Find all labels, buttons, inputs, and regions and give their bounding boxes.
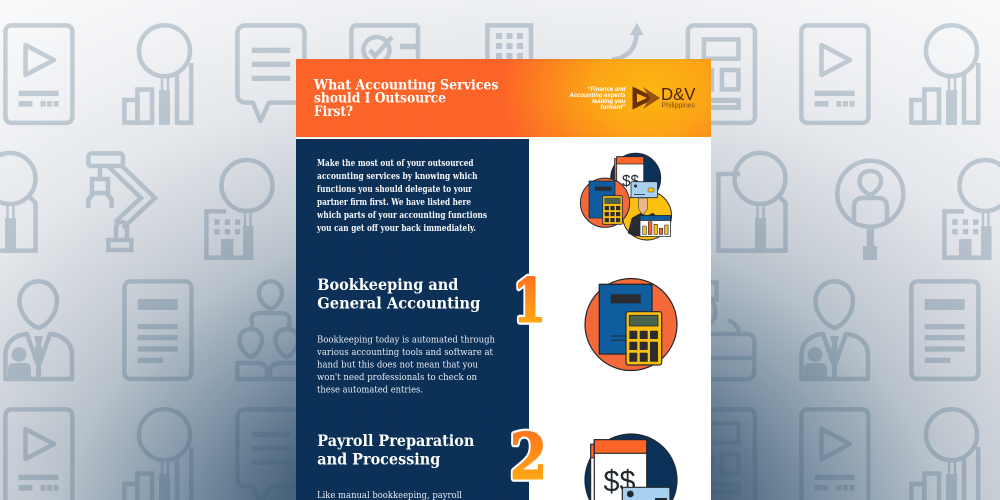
icon: book and calculator: [585, 278, 677, 370]
invoice sheet: $$: [604, 464, 636, 498]
credit card: [622, 487, 670, 500]
icon: magnifier with bar chart: [124, 25, 191, 125]
title: First?: [314, 104, 353, 120]
yellow circle with person and chart: [622, 191, 672, 240]
icon: office building: [487, 25, 531, 123]
logo tagline: [568, 87, 626, 111]
heading: section 1: [317, 275, 480, 312]
heading: section 1: Bookkeeping and: [317, 275, 458, 294]
heading: section 1: General Accounting: [317, 293, 480, 312]
logo tagline: leading you: [592, 99, 626, 105]
intro paragraph: accounting services by knowing which: [317, 171, 478, 182]
navy circle with bill and card: $$: [622, 173, 639, 190]
title: What Accounting Services: [313, 77, 499, 93]
icon: video document: [5, 409, 72, 500]
intro paragraph: Make the most out of your outsourced: [317, 158, 474, 169]
panel: orange header: [296, 59, 711, 137]
icon: manager with small person: [5, 281, 72, 381]
credit card: [631, 182, 658, 198]
icon: magnifier over person: [837, 161, 903, 260]
heading: section 2: and Processing: [317, 449, 440, 468]
logo subtitle: Philippines: [662, 100, 695, 110]
intro paragraph: you can get off your back immediately.: [316, 223, 476, 234]
logo wordmark: D&V: [661, 84, 696, 104]
icon: magnifier over document: [0, 153, 35, 253]
body text: section 1: Bookkeeping today is automated through: [317, 334, 495, 345]
title: should I Outsource: [314, 91, 446, 107]
icon: magnifier with bar chart: [124, 409, 191, 500]
intro paragraph: which parts of your accounting functions: [316, 210, 487, 221]
logo mark: [632, 86, 660, 110]
icon: video document: [801, 409, 868, 500]
panel: infographic page: [296, 59, 711, 500]
number 1: 1: [513, 266, 546, 336]
number 2: 2: [510, 420, 547, 494]
number 2: 2: [510, 420, 547, 494]
icon: speech bubble: [237, 409, 304, 500]
icon: group of people at desks: [237, 281, 299, 379]
icon: stacked books and cap: [680, 282, 754, 379]
body text: section 1: won't need professionals to check on: [317, 372, 477, 383]
body text: section 1: [316, 334, 495, 396]
intro paragraph: partner firm first. We have listed here: [317, 197, 471, 208]
icon: magnifier over building: [944, 160, 1000, 260]
icon: magnifier with bar chart: [911, 409, 978, 500]
icon: report document: [124, 281, 191, 379]
orange circle with book and calculator: [580, 178, 630, 227]
logo tagline: Accounting experts: [568, 93, 626, 99]
icon: checklist card: [351, 25, 418, 83]
back sheet: [591, 444, 596, 500]
yellow calculator: [626, 312, 662, 365]
title: [313, 77, 499, 120]
logo tagline: “Finance and: [587, 87, 626, 93]
icon: speech bubble: [237, 25, 304, 121]
logo tagline: forward”: [600, 105, 626, 111]
body text: section 1: these automated entries.: [317, 385, 423, 396]
icon: video document: [801, 25, 868, 123]
icon: robotic arm: [88, 153, 155, 250]
icon: newspaper layout: [688, 409, 755, 500]
icon: video document: [5, 25, 72, 123]
icon: report document: [911, 281, 978, 379]
icon: accounting services cluster: [580, 153, 672, 240]
icon: growth arrow: [612, 23, 644, 60]
intro paragraph: functions you should delegate to your: [317, 184, 472, 195]
logo: D&V Philippines: [632, 84, 696, 110]
icon: manager with small person: [801, 281, 868, 381]
icon: magnifier over building: [206, 160, 272, 260]
icon: invoice and credit card: [585, 434, 677, 500]
intro paragraph: [316, 158, 487, 234]
panel: navy text column: [296, 139, 529, 500]
blue ledger book: [599, 284, 652, 354]
icon: magnifier with bar chart: [911, 25, 978, 125]
number 1: 1: [513, 266, 546, 336]
body text: section 1: various accounting tools and software at: [316, 347, 493, 358]
body text: section 1: hand but this does not mean that you: [317, 360, 478, 371]
icon: newspaper layout: [688, 25, 755, 123]
icon: magnifier over document: [718, 153, 786, 253]
heading: section 2: [317, 431, 474, 468]
heading: section 2: Payroll Preparation: [317, 431, 474, 450]
